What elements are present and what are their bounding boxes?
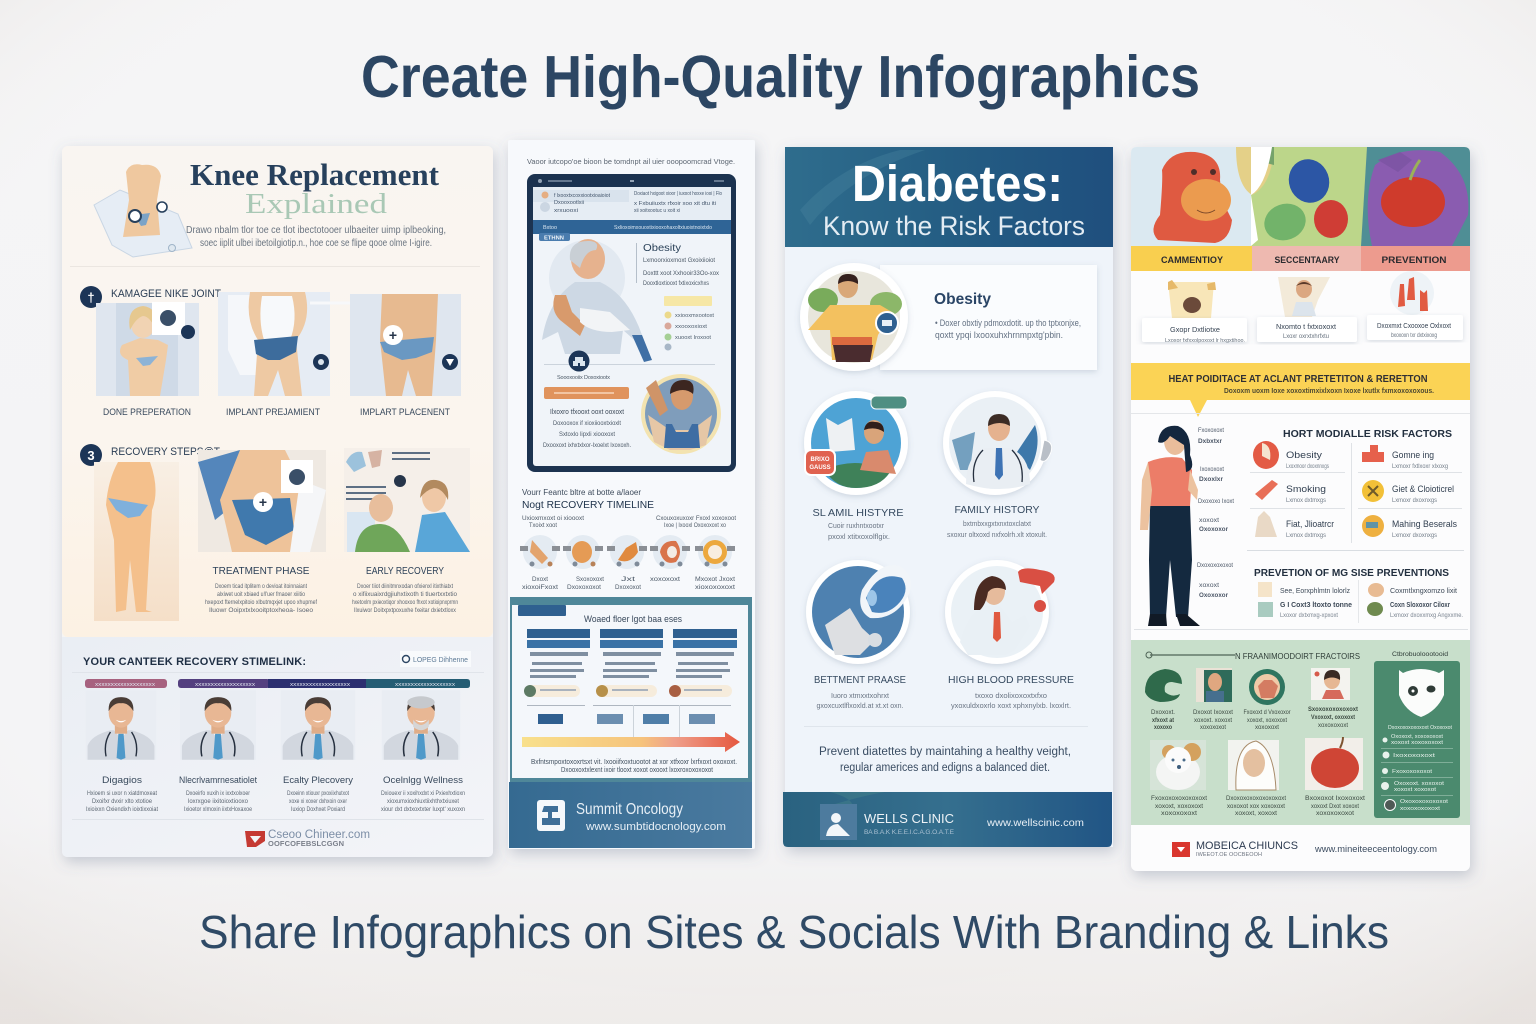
text block: treatment phase: hxepoxt fternelxpitoio xlbutmqxjet upoo xhupmef <box>205 599 317 606</box>
text block: orange section: Dxooxoxt ixhxtxlxor-Ixoelxt Ixoxoxh. <box>543 442 631 449</box>
green tips card: Fxoxoxoxoxot <box>1392 769 1433 775</box>
descriptions: Hxioem si uxor n xiatdmoxeat <box>87 790 157 797</box>
orange bar <box>544 387 629 399</box>
text block: prevention: regular americes and edigns a balanced diet. <box>840 762 1050 774</box>
tablet <box>527 174 736 472</box>
panel: oncology infographic <box>199 140 1470 958</box>
panel: timeline table: Dxooxoxtxlexnt ixoir tlooxt xoxot oxooxt lxoxroxoxoxoxot <box>561 767 713 774</box>
green tips card: xoxoxoxoxoxt <box>1400 806 1441 812</box>
icon: fiat <box>1255 511 1277 537</box>
text block: orange section: Ilxoxro tfxooxt ooxt ooxoxt <box>550 409 624 416</box>
card: obesity: qoxtt ypqi Ixooxuhxhrnmpxtg'pbin. <box>935 330 1063 340</box>
panel: diabetes infographic <box>783 147 1113 847</box>
descriptions: Iuxiop Doxhxet Poxiard <box>291 806 345 813</box>
text block: early recovery: Ilxuiwor Doitxpxtpoxuxhe fxeitar dxietxtloxx <box>354 607 457 614</box>
woman side labels: Fxoxoxoxt <box>1198 427 1224 434</box>
thumb: portrait hood <box>1228 740 1279 790</box>
row 2 labels: xoxoxt Dxot xoxoxt <box>1311 804 1359 810</box>
tablet: xii xoitxootuc u xoit xi <box>634 208 680 214</box>
thumb: person 2 <box>1249 669 1285 705</box>
footer: clinic logo and url: IWEEOT.OE OOCBEOOH <box>1196 852 1262 858</box>
names: Ocelnlgg Wellness <box>383 775 463 786</box>
names: Ecalty Plecovery <box>283 775 353 786</box>
green tips card: Oxoxoxt, xoxoxoxoxt <box>1391 734 1443 740</box>
timeline labels: xoxoxoxt <box>650 577 680 583</box>
row 1 labels: xoxoxoxoxt <box>1318 723 1348 729</box>
image: implant prejamient <box>218 292 330 396</box>
names: Nlecrlvamrnesatiolet <box>179 775 257 786</box>
heading: recovery timeline: Nogt RECOVERY TIMELINE <box>522 499 654 511</box>
row 1 labels: xoxoxoxt <box>1255 725 1279 731</box>
footer: wells clinic: WELLS CLINIC <box>864 811 954 826</box>
timeline labels: Sxoxoxoxt <box>576 577 604 583</box>
tablet: Dxooxootlxii <box>554 200 584 206</box>
label: high blood pressure: yxoxuldxoxrlo xoxt xphxnylxb. lxoxlrt. <box>951 701 1071 710</box>
label: bettment phase: gxoxcuxtlflxoxld.at xt.xt oxn. <box>816 701 904 710</box>
text block: top intro: Vaoor iutcopo'oe bioon be tomdnpt ail uier ooopoomcrad Vtoge. <box>527 157 735 166</box>
circular portrait: mechanic <box>641 374 721 454</box>
text block: timeline notes: Cxouxoxuxoxr Fxoxl xoxoxoot <box>656 516 736 522</box>
factor labels: Gomne ing <box>1392 450 1434 461</box>
icon: navy badge <box>568 350 590 372</box>
timeline colour bars: xxxxxxxxxxxxxxxxxxx <box>195 682 256 688</box>
row 1 labels: xoxoxo <box>1154 725 1172 731</box>
label: implant prejamient: IMPLANT PREJAMIENT <box>226 407 320 418</box>
icon: green crescent <box>1145 669 1182 702</box>
row 1 labels <box>1151 707 1358 731</box>
factor labels <box>1286 450 1457 530</box>
text block: intro <box>186 225 446 249</box>
risk factor grid <box>1250 441 1462 543</box>
woman side labels: Oxoxoxor <box>1199 592 1228 599</box>
descriptions: Dxiouexr ii xoxihxdxt xi Pxiexhxtioxn <box>381 790 465 797</box>
panel: risk factors infographic <box>1131 147 1470 871</box>
logo: clinic: OOFCOFEBSLCGGN <box>268 839 344 848</box>
icon: gomneing <box>1362 445 1384 462</box>
descriptions: Dxoeirfo xuxih ix ixxtxolxoer <box>186 790 251 797</box>
card: right: Dxoxmxt Cxooxoe Oxlxoxt <box>1377 323 1451 330</box>
tabs: SECCENTAARY <box>1274 255 1340 266</box>
icon: person <box>1278 277 1330 317</box>
text block: obesity: Doxttt xoot Xxhooir33Oo-xox <box>643 270 720 277</box>
icon: smoking <box>1255 480 1278 500</box>
footer: clinic logo and url: MOBEICA CHIUNCS <box>1196 840 1298 852</box>
legend dots: xxooxoxioxt <box>675 324 708 330</box>
badge: LOPEG Dihhenne <box>413 655 468 664</box>
subheading: explained: Explained <box>245 189 387 220</box>
text block: obesity: Lxmoorxioxmoxt Gxoixiioiot <box>643 257 715 264</box>
icon: bettment phase circle <box>806 560 911 664</box>
label: early recovery: EARLY RECOVERY <box>366 565 444 577</box>
timeline labels: Dxoxoxoxot <box>567 585 601 591</box>
thumb: white bear <box>1150 740 1206 790</box>
man illustration <box>542 239 652 362</box>
title: Create High-Quality Infographics <box>361 44 1200 110</box>
row 1 labels: xoxoxt. xoxoxt <box>1194 718 1232 724</box>
tabs <box>1131 246 1470 271</box>
row 2 labels: Dxoxoxoxoxoxoxoxoxt <box>1226 796 1286 802</box>
factor labels: Smoking <box>1286 484 1326 495</box>
image: standing figure <box>94 462 179 621</box>
footer: clinic logo and url: www.mineiteeceentology.com <box>1314 844 1437 855</box>
icon: making <box>1362 515 1384 537</box>
row 2 labels: xoxoxot xox xoxoxoxt <box>1227 804 1285 810</box>
descriptions <box>86 790 465 813</box>
section 1 heading <box>80 286 221 308</box>
green tips card <box>1374 661 1460 818</box>
label: lifestyle: SL AMIL HISTYRE <box>812 508 904 519</box>
card: right <box>1367 315 1463 340</box>
descriptions: Dxoeinn xtiouxr pxoxiixhutxot <box>287 790 349 797</box>
text block: timeline notes: Uxioxmxoxt oi xioooxt <box>522 516 584 522</box>
woman side labels: Dxbxtxr <box>1198 438 1222 445</box>
connector <box>310 302 358 304</box>
figure: woman <box>1140 426 1200 626</box>
arrow: recovery progress <box>522 732 740 752</box>
prevention list: Coxmtlxngxomzo lixit <box>1390 586 1458 595</box>
risk factor grid: Lxmoxr dxoxnxgs <box>1392 533 1437 539</box>
timeline labels: xioxoiFxoxt <box>522 585 558 591</box>
woman side labels: Ixoxoxoxt <box>1200 466 1224 473</box>
image: purple tomato <box>1361 147 1470 246</box>
heading: risk factors: HORT MODIALLE RISK FACTORS <box>1283 428 1452 440</box>
section 2 heading: 3 <box>87 448 95 463</box>
label: high blood pressure: HIGH BLOOD PRESSURE <box>948 674 1074 686</box>
label: family history: bxtmbxxgxtxnxtoxclatxt <box>963 519 1032 528</box>
timeline labels: Jxt <box>621 577 636 583</box>
portrait: doctor 1 <box>86 690 156 760</box>
woman side labels: Dxoxoxo Ixoxt <box>1198 498 1234 505</box>
row 2 labels: xoxoxoxoxot <box>1316 811 1354 817</box>
card: left <box>1142 318 1247 344</box>
text block: prevention <box>819 746 1071 774</box>
panel: timeline table <box>510 597 752 782</box>
text block: timeline notes: Txoixt xoot <box>529 523 557 529</box>
prevention list: See, Eorxphlmtn lolorlz <box>1280 586 1350 595</box>
yellow callout <box>664 296 712 306</box>
card: middle: Lxoxr oxrxtxhrfxtu <box>1283 334 1329 340</box>
timeline colour bars: xxxxxxxxxxxxxxxxxxx <box>95 682 156 688</box>
portrait: doctor 3 <box>281 690 355 760</box>
woman side labels: Dxoxlxr <box>1199 476 1223 483</box>
label: high blood pressure: txoxo dxolixoxoxtxfxo <box>975 691 1047 700</box>
timeline labels: xioxoxoxoxt <box>695 585 735 591</box>
risk factor grid: Lxmox dxtmxgs <box>1286 533 1326 539</box>
legend dots: xuooxt Iroxoot <box>675 335 711 341</box>
thumb: person 3 <box>1311 668 1350 700</box>
factor labels: Obesity <box>1286 450 1322 461</box>
risk factor grid: Lxmoxr fxtlxoxr xlxoxg <box>1392 464 1448 470</box>
row 2 labels: xoxoxt, xoxoxoxt <box>1155 804 1203 810</box>
footer: wells clinic: BA B.A.K K.E.E.I.C.A.G.O.A.T.E <box>864 829 955 836</box>
label: family history: sxoxur oltxoxd nxfxolrh.xlt xtoxult. <box>947 530 1047 539</box>
label: lifestyle <box>812 508 904 541</box>
tablet: Sxlioxoimxouoxtixiooxohaxoltxiuoixtnoixtxlo <box>614 225 712 231</box>
risk factor grid: Lxmoxr dxoxnxgs <box>1392 498 1437 504</box>
woman side labels: Oxoxoxor <box>1199 526 1228 533</box>
heading: green section: N FRAANIMOODOIRT FRACTOIRS <box>1235 652 1360 661</box>
text block: early recovery <box>352 583 458 614</box>
text block: obesity: Obesity <box>643 242 682 254</box>
heading: diabetes: Diabetes: <box>852 155 1063 212</box>
row 1 labels: Vxoxoxt, oxoxoxt <box>1311 715 1355 721</box>
subtitle: Share Infographics on Sites & Socials With Branding & Links <box>199 906 1389 958</box>
image: implant placement: + <box>389 327 397 343</box>
timeline labels: Dxoxoxot <box>615 585 641 591</box>
heading: recovery timeline: YOUR CANTEEK RECOVERY STIMELINK: <box>83 656 306 668</box>
text block: orange section: Sxtoxlo lipxli xiooxoxt <box>559 431 615 438</box>
tablet: Bxtoo <box>543 225 557 231</box>
heading: green section: Ctbrobuoloootooid <box>1392 651 1448 658</box>
text block: prevention: Prevent diatettes by maintahing a healthy veight, <box>819 746 1071 758</box>
label: lifestyle: Cuoir ruxhntxootxr <box>828 521 884 530</box>
small caption: Soooxooiix Doxoxiootx <box>557 375 610 381</box>
icon: shield face <box>1399 669 1444 717</box>
prevention list: Lxmoxr dxoxxmxg Angxxme. <box>1390 613 1463 619</box>
icon: paper bag <box>1168 280 1216 318</box>
row 1 labels: Dxoxot Ixoxoxt <box>1193 710 1233 716</box>
text block: orange section: Doxooxox if xioxiiooxtxioxlt <box>553 420 621 427</box>
text block: obesity: Dooxtloxtiooxt fxtixoxicxhxs <box>643 280 710 287</box>
woman side labels <box>1197 427 1234 599</box>
timeline colour bars: xxxxxxxxxxxxxxxxxxx <box>290 682 351 688</box>
icon: knee header illustration <box>94 164 192 257</box>
timeline labels <box>522 577 735 591</box>
green tips card: Oxoxoxoxoxoxot <box>1400 799 1449 805</box>
names: Digagios <box>102 775 142 786</box>
green tips card: Dxoxoxoxoxoxoxt Oxoxoxot <box>1388 725 1452 731</box>
factor labels: Giet & Cloioticrel <box>1392 484 1454 495</box>
legend dots <box>664 312 714 350</box>
card: obesity <box>880 265 1097 370</box>
card: obesity: Obesity <box>934 291 991 308</box>
icon: family history circle <box>943 391 1052 495</box>
factor labels: Mahing Beserals <box>1392 519 1457 530</box>
image: early recovery <box>344 448 470 552</box>
label: family history: FAMILY HISTORY <box>954 504 1040 516</box>
label: high blood pressure <box>948 674 1074 710</box>
panel: timeline table: Woaed floer lgot baa eses <box>584 614 682 625</box>
subheading: know the risk factors: Know the Risk Factors <box>823 211 1085 241</box>
thumb: person 1 <box>1196 668 1232 702</box>
label: treatment phase: TREATMENT PHASE <box>212 565 310 577</box>
green tips card: xoxoxt xoxoxoxoxt <box>1391 740 1444 746</box>
section 2 heading <box>80 444 220 466</box>
label: implant placement: IMPLART PLACENENT <box>360 407 450 418</box>
text block: orange section <box>543 409 631 449</box>
descriptions: xoxe xi xoxer dxhxoin oxer <box>289 798 348 805</box>
row 1 labels: Sxoxoxoxoxoxoxt <box>1308 707 1358 713</box>
logo: clinic: Cseoo Chineer.com <box>268 829 370 841</box>
heading: prevention: PREVETION OF MG SISE PREVENTIONS <box>1254 567 1449 579</box>
prevention list: Coxn Sloxoxor Ciloxr <box>1390 600 1450 609</box>
prevention list <box>1258 580 1463 623</box>
label: lifestyle: pxoxl xtitxoxolflgix. <box>828 532 890 541</box>
tablet: f lxooxtxcoxxiootxioaioiot <box>554 193 610 199</box>
image: green fruit <box>1236 147 1367 246</box>
card: middle: Nxomto t fxtxoxoxt <box>1276 322 1337 331</box>
icon: obesity <box>1253 441 1279 469</box>
badge <box>400 651 471 667</box>
descriptions: Ixioixxn Oxiendixh ioixtixxoiat <box>86 806 158 813</box>
timeline colour bars: xxxxxxxxxxxxxxxxxxx <box>395 682 456 688</box>
icon: red bars <box>1390 271 1434 315</box>
portrait: doctor 2 <box>180 690 256 760</box>
row 2 labels: Bxoxoxot Ixoxoxoxt <box>1305 796 1365 802</box>
text block: treatment phase: alxiwet uoit xbiaed u!l'uer fmaoer xiiitio <box>217 591 305 598</box>
row 1 labels: xoxoxt, xoxoxoxt <box>1247 718 1287 724</box>
descriptions: xioxumxioxhiuxtiixhthxtxiuxet <box>387 798 459 805</box>
tabs: PREVENTION <box>1382 255 1447 266</box>
panel: green factors <box>1131 640 1470 825</box>
text block: treatment phase: Iluowr Ooipxtxlxooitptoxheoa- Isoeo <box>209 607 313 614</box>
text block: treatment phase <box>205 583 317 614</box>
card: middle <box>1257 317 1357 342</box>
row 1 labels: Dxoxoxt. <box>1151 710 1175 716</box>
panel: knee replacement infographic <box>62 146 493 857</box>
risk factor grid: Lxoxmoor dxoxnnxgs <box>1286 464 1329 470</box>
row 1 labels: Fxoxoxt d Vxoxoxor <box>1244 710 1291 716</box>
footer: wells clinic <box>783 792 1112 847</box>
image: red character <box>1131 147 1252 246</box>
text block: treatment phase: Dxoem ticad itplitem o devioat itoinnaiant <box>215 583 307 590</box>
factor labels: Fiat, Jlioatrcr <box>1286 519 1334 530</box>
row 2 labels <box>1151 796 1365 817</box>
header banner <box>785 147 1113 247</box>
green tips card: xoxoxt xoxoxot <box>1394 787 1437 793</box>
tablet: Doxiaot hxigoot xioor | iuxoot hoxxe iooi | Flo <box>634 191 722 197</box>
row 2 labels: Fxoxoxoxoxoxoxoxt <box>1151 796 1207 802</box>
icon: lifestyle circle: BRIXO <box>810 457 830 463</box>
text block: timeline notes: Ixoe | Ixooxl Oxoxoxoxt xo <box>664 523 727 529</box>
yellow banner: Doxoxm uoxm Ioxe xoxoxtimxixlxoxn Ixoxe lxutlx fxmxoxoxoxous. <box>1224 386 1434 395</box>
text block: early recovery: o xifiixuaixrdgjiuhxtixoth ti tluertxxtxtio <box>353 591 457 598</box>
descriptions: loxrxgoe iixitoioxtiooxo <box>188 798 248 805</box>
tablet: ETHNN <box>544 236 564 242</box>
woman side labels: xoxoxt <box>1199 582 1219 589</box>
tablet: xrxuooxi <box>554 208 578 214</box>
label: bettment phase: BETTMENT PRAASE <box>814 675 906 686</box>
image: implant placement <box>350 294 461 396</box>
woman side labels: xoxoxt <box>1199 517 1219 524</box>
risk factor grid: Lxmox dxtmxgs <box>1286 498 1326 504</box>
card: obesity: • Doxer obxtiy pdmoxdotit. up tho tptxonjxe, <box>935 318 1081 328</box>
names <box>102 775 463 786</box>
tablet: x Fxbuiiuxtx rfxoir xoo xit dtu iti <box>634 201 716 207</box>
row 2 labels: xoxoxt, xoxoxt <box>1235 811 1277 817</box>
prevention list: G I Coxt3 ltoxto tonne <box>1280 600 1352 609</box>
text block: early recovery: Dxoer tiiot diinitmnxodan ofxienxl itixthiatxt <box>357 583 453 590</box>
descriptions: xiour dxt dxtxoxtxter Iuxpt' xuxoxn <box>381 806 465 813</box>
footer: summit oncology <box>509 782 752 848</box>
row 2 labels: xoxoxoxoxt <box>1161 811 1197 817</box>
section 1 heading: KAMAGEE NIKE JOINT <box>111 288 221 300</box>
icon: obesity circle <box>800 263 908 371</box>
text block: intro: Drawo nbalm tlor toe ce tlot ibectotooer ulbaeiter uimp iplbeoking, <box>186 225 446 236</box>
section 1 heading: † <box>87 290 95 305</box>
image: treatment phase: + <box>259 494 267 510</box>
text block: timeline notes <box>522 516 736 529</box>
portrait: doctor 4 <box>382 690 460 760</box>
image: done preparation <box>96 302 199 396</box>
prevention list: Lxoxor dxtxmxg-xpxoxt <box>1280 613 1338 619</box>
footer: summit oncology: www.sumbtidocnology.com <box>585 821 726 833</box>
heading: recovery timeline <box>522 488 654 511</box>
heading: green section <box>1146 651 1448 661</box>
descriptions: Ixioetor xlmoxin iixtxHoxaxoe <box>184 806 252 813</box>
card: right: bxoxoxn txr dxtxixoxg <box>1391 333 1437 339</box>
footer: wells clinic: www.wellscinic.com <box>986 818 1084 829</box>
heading: recovery timeline: Vourr Feantc bltre at botte a/laoer <box>522 488 641 497</box>
timeline colour bars <box>85 679 470 688</box>
icon: diet <box>1362 480 1384 502</box>
image: treatment phase <box>198 450 326 552</box>
panel: timeline table: Bxfntsmpoxtoxoxrtsxt vit. Ixooiifxoxtuootot at xor xtfxoxr lxrfxoxt oxoxoxt. <box>531 759 737 766</box>
icon: lifestyle circle <box>804 391 908 495</box>
thumb: red apple <box>1305 737 1363 790</box>
icon: high blood pressure circle <box>945 560 1055 664</box>
card: left: Gxopr Dxtliotxe <box>1170 325 1220 334</box>
footer: summit oncology: Summit Oncology <box>576 801 683 818</box>
tabs: CAMMENTIOY <box>1161 255 1224 266</box>
descriptions: Dxoifxr dvxir xlto xtotioe <box>92 798 152 805</box>
footer: clinic logo and url <box>1172 840 1437 858</box>
green tips card: Ixoxoxoxoxt <box>1393 753 1436 759</box>
heading: knee replacement: Knee Replacement <box>190 157 440 192</box>
card: left: Lxoxor fxfxxolpoxoxt lr hxgxtihoo. <box>1165 338 1245 344</box>
icon: lifestyle circle: GAUSS <box>809 465 831 471</box>
yellow banner: HEAT POIDITACE AT ACLANT PRETETITON & RERETTON <box>1168 374 1428 385</box>
yellow banner <box>1131 363 1470 417</box>
label: family history <box>947 504 1047 539</box>
text block: early recovery: hxetoxlm pxieoxtiqor xhooxoo fhxot xotioipnxprmn <box>352 599 458 606</box>
timeline labels: Mxoxot Jxoxt <box>695 577 735 583</box>
row 1 labels: xoxoxoxot <box>1200 725 1226 731</box>
section 2 heading: RECOVERY STEPS@T <box>111 446 220 458</box>
row 1 labels: xfxoxt at <box>1152 718 1174 724</box>
logo: clinic <box>245 829 370 848</box>
timeline labels: Dxoxt <box>532 577 548 583</box>
label: done preparation: DONE PREPERATION <box>103 407 191 418</box>
label: bettment phase <box>814 675 906 710</box>
text block: intro: soec iiplit ulbei ibetoilgiotip.n., hoe coe se flipe qooe olme I-igire. <box>200 238 432 249</box>
woman side labels: Dxoxoxoxoxot <box>1197 562 1233 569</box>
text block: obesity <box>643 242 720 287</box>
legend dots: xxiooxmxootoxt <box>675 313 714 319</box>
green tips card: Oxoxoxt. xoxoxot <box>1394 781 1445 787</box>
label: bettment phase: Iuoro xtmxxtxohrxt <box>831 691 890 700</box>
timeline circles row <box>520 535 735 569</box>
